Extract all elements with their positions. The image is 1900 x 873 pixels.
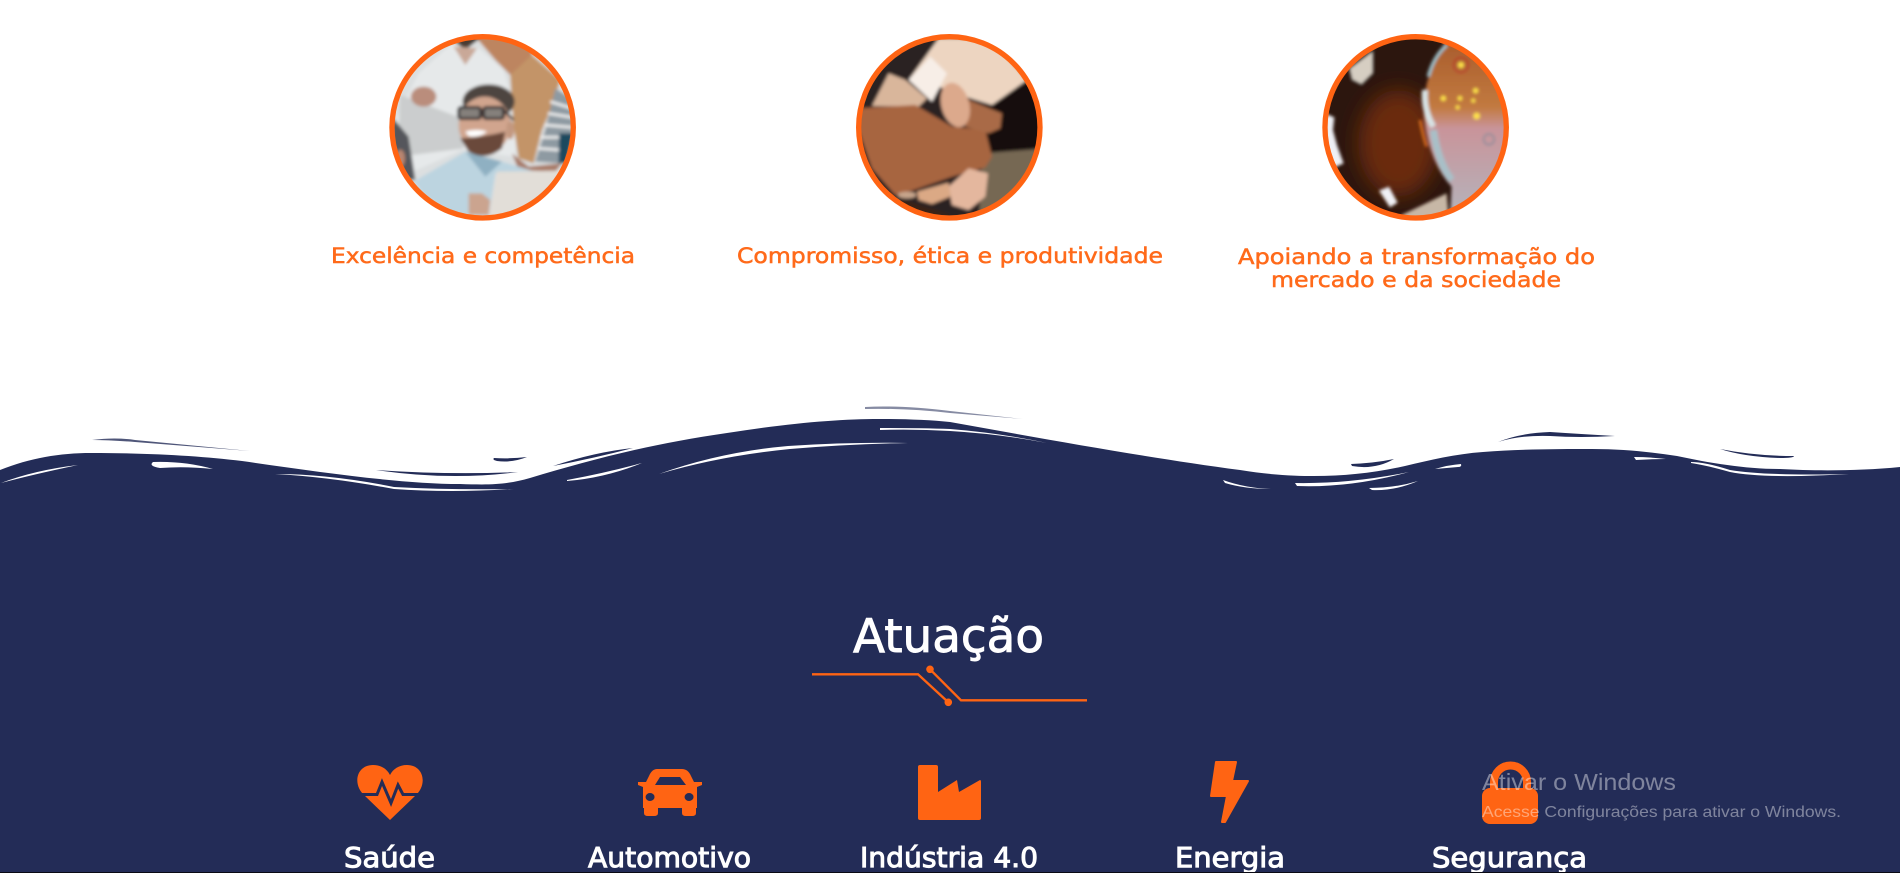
icon: car	[638, 769, 702, 816]
icon: padlock	[1482, 766, 1538, 824]
icon: lightning bolt	[1211, 762, 1248, 822]
caption: transformation: Apoiando a transformação do	[1238, 245, 1595, 270]
wave background	[0, 406, 1900, 873]
watermark: Windows activation: Ativar o Windows	[1482, 769, 1676, 795]
watermark: Windows activation: Acesse Configurações para ativar o Windows.	[1482, 804, 1841, 821]
photo: handshake	[852, 30, 1048, 226]
panel: values	[331, 30, 1595, 293]
caption: excellence: Excelência e competência	[331, 244, 635, 269]
photo: smiling professional	[385, 30, 581, 226]
sector: automotive	[588, 769, 751, 873]
brush strokes: dark	[92, 406, 1794, 476]
caption: commitment: Compromisso, ética e produtividade	[737, 244, 1163, 269]
bottom edge line	[0, 872, 1900, 873]
heading: Atuação: Atuação	[853, 609, 1044, 663]
sector: health	[344, 765, 435, 873]
icon: factory	[918, 765, 981, 820]
sector: energy	[1175, 762, 1285, 873]
sector: industry	[860, 765, 1038, 873]
photo: man and digital globe	[1322, 34, 1509, 221]
caption: transformation	[1238, 245, 1595, 293]
icon: heart with pulse	[352, 765, 428, 820]
heading divider: circuit line	[812, 667, 1087, 705]
sector: security	[1432, 766, 1587, 873]
watermark: Windows activation	[1482, 769, 1841, 821]
caption: transformation: mercado e da sociedade	[1271, 268, 1561, 293]
brush strokes: light	[1, 428, 1849, 491]
